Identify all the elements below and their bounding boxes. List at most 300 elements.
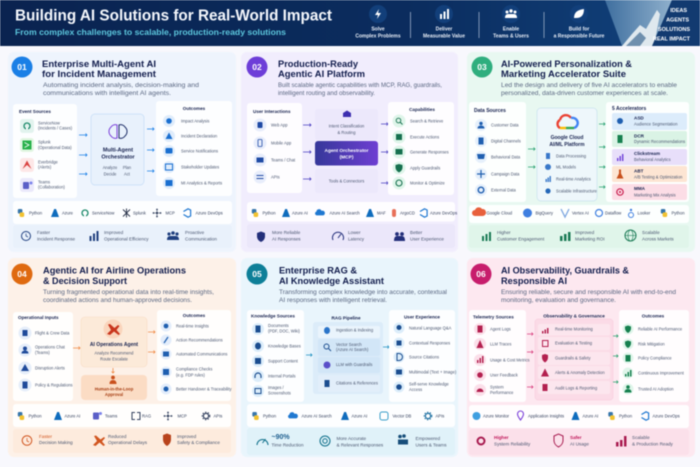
impact strip 05: ~90% bbox=[272, 434, 290, 441]
impact strip 04: Operational Delays bbox=[108, 440, 148, 445]
intent classification: & Routing bbox=[338, 130, 356, 135]
five accelerators: 5 Accelerators bbox=[612, 106, 646, 112]
impact strip 03: Scalable bbox=[642, 230, 660, 235]
header banner bbox=[0, 0, 700, 46]
impact strip 05: Time Reduction bbox=[272, 442, 304, 448]
tech stack 05: Python bbox=[263, 414, 277, 418]
heading 04: & Decision Support bbox=[43, 276, 128, 287]
orchestrator: Act bbox=[124, 172, 131, 176]
tech stack 02: Azure AI Search bbox=[330, 210, 360, 216]
subtitle: From complex challenges to scalable, production-ready solutions bbox=[15, 27, 286, 37]
tech stack 04: RAG bbox=[142, 414, 151, 418]
knowledge sources bbox=[247, 310, 304, 402]
impact strip 02 bbox=[247, 224, 455, 248]
event sources: (Operational Data) bbox=[38, 145, 72, 150]
icon: plane bbox=[104, 320, 122, 338]
capabilities: Capabilities bbox=[409, 107, 435, 112]
accelerator: DCR bbox=[612, 131, 687, 147]
heading 05: AI Knowledge Assistant bbox=[279, 276, 385, 287]
human-in-the-loop approval bbox=[81, 375, 147, 400]
impact strip 03: Across Markets bbox=[642, 236, 674, 242]
outcomes 06 bbox=[619, 310, 689, 402]
accelerator: DCR: Dynamic Recommendations bbox=[634, 139, 685, 144]
impact strip 06: Scalable bbox=[632, 435, 650, 440]
impact strip 05: More Accurate bbox=[336, 436, 367, 441]
row: real-time monitoring: Real-time Monitoring bbox=[555, 326, 593, 332]
capabilities: Execute Actions bbox=[410, 134, 439, 140]
orchestrator: Orchestrator bbox=[101, 154, 136, 160]
pipeline step: vector search bbox=[318, 339, 380, 356]
outcomes 06: Policy Compliance bbox=[638, 356, 672, 360]
impact strip 06: Higher bbox=[494, 435, 509, 440]
accelerator: MMA: Marketing Mix Analysis bbox=[634, 192, 676, 198]
mountain image bbox=[605, 0, 700, 46]
tagline stack: REAL IMPACT bbox=[653, 36, 691, 42]
tech stack 02: Python bbox=[262, 210, 276, 216]
telemetry sources: LLM Traces bbox=[490, 342, 511, 346]
heading 04 bbox=[43, 266, 186, 287]
AI operations agent: AI Operations Agent bbox=[90, 342, 138, 348]
outcomes 04: Better Handover & Traceability bbox=[176, 386, 232, 392]
observability and governance: Observability & Governance bbox=[543, 314, 605, 318]
AI operations agent: Route Escalate bbox=[100, 356, 129, 362]
number badge 02 bbox=[246, 56, 268, 78]
user experience bbox=[389, 310, 457, 402]
impact strip 06: System Reliability bbox=[494, 442, 531, 446]
number badge 06 bbox=[470, 264, 492, 284]
tech stack 04: MCP bbox=[178, 414, 187, 418]
arrows to outcomes bbox=[147, 128, 154, 172]
impact strip 06 bbox=[469, 429, 689, 455]
human-in-the-loop approval: Approval bbox=[105, 392, 123, 397]
header item: solve bbox=[355, 5, 401, 40]
pipeline step: vector search: (Azure AI Search) bbox=[336, 347, 369, 352]
pipeline step: citations: Citations & References bbox=[336, 380, 378, 386]
outcomes 06: Risk Mitigation bbox=[638, 342, 665, 346]
user interactions: Mobile App bbox=[271, 140, 292, 146]
event sources: Teams bbox=[38, 180, 50, 184]
heading 03: AI-Powered Personalization & bbox=[501, 59, 632, 70]
capabilities: Generate Responses bbox=[410, 150, 449, 154]
description 06 bbox=[501, 290, 676, 304]
row: guardrails: Guardrails & Safety bbox=[555, 356, 591, 360]
description 06: monitoring, evaluation and governance. bbox=[501, 298, 616, 304]
data sources: Digital Channels bbox=[491, 138, 521, 144]
arrows into orchestrator 02 bbox=[303, 124, 311, 180]
impact strip 01 bbox=[13, 225, 232, 248]
AI operations agent bbox=[81, 317, 147, 367]
event sources: (Incidents / Cases) bbox=[38, 126, 73, 130]
outcomes: Service Notifications bbox=[181, 148, 218, 154]
tech stack 01: Python bbox=[29, 210, 43, 216]
tech stack 06: Azure DevOps bbox=[652, 414, 680, 418]
capabilities bbox=[388, 102, 454, 195]
impact strip 04 bbox=[13, 429, 231, 453]
outcomes 04: Real-time Insights bbox=[176, 324, 209, 328]
impact strip 05: Users & Teams bbox=[416, 442, 447, 448]
outcomes 06: Reliable AI Performance bbox=[638, 326, 683, 332]
number badge 05: 05 bbox=[252, 269, 262, 279]
tech stack 01: MCP bbox=[166, 210, 175, 216]
tech stack 01: ServiceNow bbox=[92, 210, 115, 216]
data sources: Campaign Data bbox=[491, 172, 520, 176]
operational inputs: Operational Inputs bbox=[18, 315, 59, 320]
accelerator: Clickstream: Behavioral Analytics bbox=[634, 157, 671, 162]
number badge 04 bbox=[12, 264, 32, 284]
panel 03: personalization and marketing bbox=[467, 52, 695, 252]
tech stack 04: Azure AI bbox=[64, 414, 80, 418]
arrow into pipeline bbox=[306, 354, 312, 356]
tech stack 03: Google Cloud bbox=[486, 210, 513, 216]
number badge 01 bbox=[12, 56, 32, 78]
header item: solve: Complex Problems bbox=[355, 34, 401, 40]
number badge 02: 02 bbox=[252, 62, 262, 72]
telemetry sources: User Feedback bbox=[490, 372, 519, 378]
description 05 bbox=[279, 290, 447, 304]
tech stack 02: ArgoCD bbox=[400, 210, 415, 216]
impact strip 03: Customer Engagement bbox=[497, 236, 545, 242]
impact strip 06: & Production Ready bbox=[632, 442, 674, 446]
description 03 bbox=[501, 83, 678, 97]
tech stack 01 bbox=[13, 201, 232, 224]
user interactions: User Interactions bbox=[253, 109, 291, 114]
accelerator: Clickstream bbox=[612, 149, 687, 165]
event sources: Everbridge bbox=[38, 160, 59, 164]
heading 02 bbox=[278, 59, 365, 80]
impact strip 03: Higher bbox=[497, 230, 511, 235]
tagline stack: SOLUTIONS bbox=[658, 27, 690, 33]
number badge 04: 04 bbox=[17, 269, 27, 279]
arrows to outcomes 04 bbox=[148, 330, 155, 354]
accelerator: MMA bbox=[612, 184, 687, 200]
impact strip 04: Decision Making bbox=[39, 440, 73, 445]
tech stack 06: Azure Monitor bbox=[483, 414, 510, 418]
row: evaluation: Evaluation & Testing bbox=[555, 340, 593, 346]
panel 01: incident management bbox=[8, 52, 236, 252]
impact strip 01: Operational Efficiency bbox=[104, 236, 149, 242]
tech stack 03: BigQuery bbox=[536, 210, 554, 216]
orchestrator: Analyze bbox=[103, 165, 118, 170]
event sources: Splunk bbox=[38, 140, 51, 144]
impact strip 01: Incident Response bbox=[37, 236, 75, 242]
observability and governance bbox=[535, 314, 613, 400]
accelerator: ASD: Audience Segmentation bbox=[634, 122, 678, 126]
header item: enable bbox=[493, 5, 529, 40]
heading 04: Agentic AI for Airline Operations bbox=[43, 266, 186, 276]
pipeline step: ingestion: Ingestion & Indexing bbox=[336, 328, 374, 332]
impact strip 02: User Experience bbox=[410, 236, 444, 242]
row: alerts: Alerts & Anomaly Detection bbox=[555, 370, 605, 375]
event sources bbox=[13, 104, 77, 198]
tech stack 05 bbox=[247, 404, 455, 427]
arrow into agent bbox=[73, 346, 80, 350]
tech stack 03 bbox=[469, 205, 689, 223]
knowledge sources: Images / bbox=[268, 385, 285, 390]
impact strip 06: Safer bbox=[570, 435, 582, 440]
data sources: Data Sources bbox=[474, 108, 506, 114]
icon: google cloud bbox=[558, 115, 578, 128]
operational inputs: Operations Chat bbox=[35, 344, 66, 350]
tech stack 05: Vector DB bbox=[392, 414, 412, 418]
tech stack 04: APIs bbox=[214, 414, 222, 418]
impact strip 01: Proactive bbox=[185, 230, 205, 235]
impact strip 02: Latency bbox=[348, 236, 365, 242]
operational inputs: Policy & Regulations bbox=[35, 382, 73, 388]
user interactions: APIs bbox=[271, 174, 280, 180]
google cloud platform: Google Cloud bbox=[551, 135, 583, 141]
panel 05: RAG knowledge assistant bbox=[241, 258, 458, 457]
outcomes bbox=[156, 101, 232, 196]
heading 06 bbox=[501, 266, 629, 287]
description 02: intelligent routing and observability. bbox=[278, 91, 375, 97]
AI operations agent: Analyze Recommend bbox=[95, 350, 134, 356]
outcomes: Outcomes bbox=[183, 106, 206, 111]
impact strip 05: & Relevant Responses bbox=[336, 442, 384, 448]
impact strip 02: AI Responses bbox=[272, 236, 301, 242]
arrows to accelerators bbox=[599, 122, 605, 188]
description 05: AI responses with intelligent retrieval. bbox=[279, 298, 387, 304]
description 05: Transforming complex knowledge into accurate, contextual bbox=[279, 290, 447, 296]
human-in-the-loop approval: Human-in-the-Loop bbox=[95, 386, 134, 392]
google cloud platform: AI/ML Platform bbox=[549, 142, 585, 148]
impact strip 05 bbox=[247, 428, 455, 455]
impact strip 04: Reduced bbox=[108, 434, 127, 439]
description 02: Built scalable agentic capabilities with MCP, RAG, guardrails, bbox=[278, 83, 442, 89]
user experience: Contextual Responses bbox=[409, 340, 450, 346]
description 04 bbox=[43, 290, 214, 304]
panel 02: agentic platform bbox=[241, 52, 458, 252]
tech stack 06: Python bbox=[619, 414, 633, 418]
event sources: ServiceNow bbox=[38, 120, 60, 126]
google cloud platform bbox=[537, 108, 598, 201]
knowledge sources: Screenshots bbox=[268, 390, 291, 396]
accelerator: Clickstream: Clickstream bbox=[634, 151, 660, 156]
user experience: Access bbox=[409, 387, 422, 392]
operational inputs: Disruption Alerts bbox=[35, 366, 65, 370]
google cloud platform: Real-time Analytics bbox=[556, 176, 591, 182]
tech stack 02: Azure AI bbox=[292, 210, 308, 216]
capabilities: Monitor & Optimize bbox=[410, 180, 446, 186]
data sources bbox=[469, 102, 526, 202]
tech stack 05: APIs bbox=[436, 414, 444, 418]
heading 01: for Incident Management bbox=[42, 69, 157, 80]
tech stack 01: Azure DevOps bbox=[196, 210, 223, 216]
impact strip 03: Improved bbox=[575, 230, 595, 235]
telemetry sources: Agent Logs bbox=[490, 326, 511, 332]
accelerator: MMA: MMA bbox=[634, 186, 646, 191]
arrow to human approval bbox=[112, 368, 114, 373]
heading 02: Agentic AI Platform bbox=[278, 69, 365, 80]
outcomes: Impact Analysis bbox=[181, 118, 209, 124]
tech stack 06 bbox=[469, 405, 689, 428]
arrow to user experience bbox=[383, 346, 389, 348]
description 04: coordinated actions and human-approved decisions. bbox=[43, 298, 192, 304]
telemetry sources: Performance bbox=[490, 390, 514, 395]
outcomes 04: Compliance Checks bbox=[176, 366, 212, 372]
knowledge sources: Support Content bbox=[268, 358, 299, 364]
agent orchestrator: (MCP) bbox=[340, 154, 354, 160]
panel 04: airline operations bbox=[8, 258, 236, 457]
outcomes: Incident Declaration bbox=[181, 134, 218, 138]
event sources: Event Sources bbox=[19, 109, 51, 114]
tech stack 01: Splunk bbox=[133, 210, 147, 216]
tech stack 02: MAF bbox=[377, 210, 386, 216]
tech stack 05: Azure AI bbox=[352, 414, 367, 418]
impact strip 03 bbox=[469, 225, 689, 248]
title: Building AI Solutions for Real-World Impact bbox=[15, 8, 332, 24]
user interactions: Web App bbox=[271, 122, 288, 128]
number badge 06: 06 bbox=[476, 269, 486, 279]
description 01: Automating incident analysis, decision-making and bbox=[43, 83, 199, 89]
accelerator: ABT: ABT bbox=[634, 168, 644, 174]
impact strip 02: Lower bbox=[348, 230, 361, 235]
outcomes 06: Continuous Improvement bbox=[638, 370, 685, 376]
RAG pipeline: RAG Pipeline bbox=[331, 316, 361, 320]
number badge 03: 03 bbox=[477, 62, 487, 72]
intent classification: Intent Classification bbox=[329, 124, 365, 128]
impact strip 01: Communication bbox=[185, 236, 217, 242]
arrows into platform bbox=[528, 148, 535, 168]
orchestrator: Decide bbox=[104, 172, 117, 176]
description 02 bbox=[278, 83, 442, 97]
heading 03: Marketing Accelerator Suite bbox=[501, 69, 626, 80]
RAG pipeline bbox=[313, 316, 383, 394]
tagline stack: IDEAS bbox=[670, 8, 687, 14]
orchestrator: Plan bbox=[123, 165, 132, 170]
description 06: Ensuring reliable, secure and responsible AI with end-to-end bbox=[501, 290, 676, 296]
user experience: Natural Language Q&A bbox=[409, 326, 452, 330]
tech stack 04: Teams bbox=[105, 414, 117, 418]
description 03: Led the design and delivery of five AI accelerators to enable bbox=[501, 83, 678, 89]
impact strip 04: Improved bbox=[177, 434, 197, 439]
accelerator: ABT bbox=[612, 166, 687, 182]
outcomes 04: Automated Communications bbox=[176, 352, 227, 356]
outcomes 04: Outcomes bbox=[183, 313, 206, 318]
outcomes: Stakeholder Updates bbox=[181, 164, 219, 170]
accelerator: ASD: ASD bbox=[634, 116, 644, 120]
panel 06: observability and responsible AI bbox=[467, 258, 695, 457]
heading 03 bbox=[501, 59, 632, 80]
tech stack 01: Azure bbox=[62, 210, 74, 216]
tech stack 06: Azure AI bbox=[582, 414, 598, 418]
number badge 05 bbox=[246, 264, 268, 284]
header item: solve: Solve bbox=[371, 26, 385, 32]
description 03: personalized, data-driven customer experiences at scale. bbox=[501, 91, 668, 97]
event sources: (Alerts) bbox=[38, 164, 52, 170]
data sources: Behavioral Data bbox=[491, 154, 521, 160]
accelerator: ABT: A/B Testing & Optimization bbox=[634, 174, 683, 180]
header item: responsible future bbox=[554, 5, 605, 40]
user experience: User Experience bbox=[404, 314, 440, 320]
heading 05 bbox=[279, 266, 385, 287]
impact strip 02: More Reliable bbox=[272, 230, 301, 235]
arrows into observability bbox=[527, 332, 533, 388]
telemetry sources: Telemetry Sources bbox=[473, 314, 514, 320]
outcomes 04: Action Recommendations bbox=[176, 338, 223, 342]
data sources: External Data bbox=[491, 188, 517, 192]
outcomes 06: Outcomes bbox=[642, 314, 665, 318]
tech stack 04: Python bbox=[28, 414, 42, 418]
orchestrator: Multi-Agent bbox=[103, 148, 133, 154]
tech stack 02 bbox=[247, 202, 457, 222]
user interactions: Teams / Chat bbox=[271, 158, 296, 162]
header item: deliver: Measurable Value bbox=[423, 34, 465, 40]
heading 02: Production-Ready bbox=[278, 59, 359, 70]
tech stack 03: Dataflow bbox=[605, 210, 622, 216]
header item: deliver: Deliver bbox=[436, 26, 452, 32]
header item: responsible future: a Responsible Future bbox=[554, 34, 605, 40]
accelerator: ASD bbox=[612, 113, 687, 130]
google cloud platform: Data Processing bbox=[556, 154, 587, 158]
orchestrator bbox=[91, 114, 144, 185]
knowledge sources: Documents bbox=[268, 323, 289, 328]
tech stack 06: Application Insights bbox=[528, 414, 564, 418]
tools and connectors: Tools & Connectors bbox=[329, 178, 364, 184]
outcomes 04: (e.g. FDP rules) bbox=[176, 372, 205, 378]
user interactions bbox=[247, 103, 302, 193]
outcomes: MI Analytics & Reports bbox=[181, 180, 222, 186]
user experience: Source Citations bbox=[409, 354, 439, 360]
arrows to capabilities bbox=[381, 122, 388, 184]
header item: enable: Teams & Users bbox=[493, 34, 529, 40]
impact strip 01: Improved bbox=[104, 230, 124, 235]
tech stack 04 bbox=[13, 404, 231, 427]
description 04: Turning fragmented operational data into real-time insights, bbox=[43, 290, 214, 296]
tagline stack bbox=[653, 8, 691, 42]
google cloud platform: Scalable Infrastructure bbox=[556, 188, 598, 194]
arrows into orchestrator bbox=[79, 134, 87, 176]
accelerator: DCR: DCR bbox=[634, 134, 645, 138]
capabilities: Search & Retrieve bbox=[410, 118, 444, 124]
knowledge sources: Knowledge Bases bbox=[268, 344, 301, 348]
impact strip 04: Faster bbox=[39, 434, 52, 439]
description 01 bbox=[43, 83, 199, 97]
knowledge sources: (PDF, DOC, Wiki) bbox=[268, 328, 300, 334]
outcomes 06: Trusted AI Adoption bbox=[638, 386, 674, 392]
capabilities: Apply Guardrails bbox=[410, 166, 440, 170]
description 01: communications with intelligent AI agents. bbox=[43, 91, 171, 97]
agent orchestrator bbox=[315, 141, 378, 166]
five accelerators bbox=[606, 102, 689, 202]
heading 06: AI Observability, Guardrails & bbox=[501, 266, 629, 276]
operational inputs: Flight & Crew Data bbox=[35, 330, 70, 336]
impact strip 04: Safety & Compliance bbox=[177, 440, 220, 445]
tech stack 02: Azure DevOps bbox=[430, 210, 457, 216]
agent orchestrator: Agent Orchestrator bbox=[325, 148, 369, 154]
knowledge sources: Knowledge Sources bbox=[251, 314, 295, 318]
tools and connectors bbox=[315, 169, 378, 193]
header item: enable: Enable bbox=[503, 26, 519, 32]
tech stack 03: Vertex AI bbox=[572, 210, 589, 216]
heading 05: Enterprise RAG & bbox=[279, 266, 357, 276]
operational inputs: (Teams) bbox=[35, 350, 50, 355]
number badge 03 bbox=[472, 56, 492, 78]
telemetry sources: Usage & Cost Metrics bbox=[490, 358, 530, 362]
outcomes 04 bbox=[157, 310, 232, 401]
tech stack 03: Looker bbox=[638, 210, 651, 216]
heading 01 bbox=[42, 59, 157, 80]
tech stack 03: Python bbox=[672, 210, 685, 216]
user experience: Self-serve Knowledge bbox=[409, 382, 450, 386]
impact strip 01: Faster bbox=[37, 230, 50, 235]
pipeline step: LLM: LLM with Guardrails bbox=[336, 362, 372, 367]
knowledge sources: Internal Portals bbox=[268, 374, 296, 378]
operational inputs bbox=[13, 312, 73, 401]
event sources: (Collaboration) bbox=[38, 184, 65, 190]
heading 01: Enterprise Multi-Agent AI bbox=[42, 59, 156, 70]
telemetry sources bbox=[469, 310, 530, 402]
pipeline step: vector search: Vector Search bbox=[336, 342, 362, 347]
